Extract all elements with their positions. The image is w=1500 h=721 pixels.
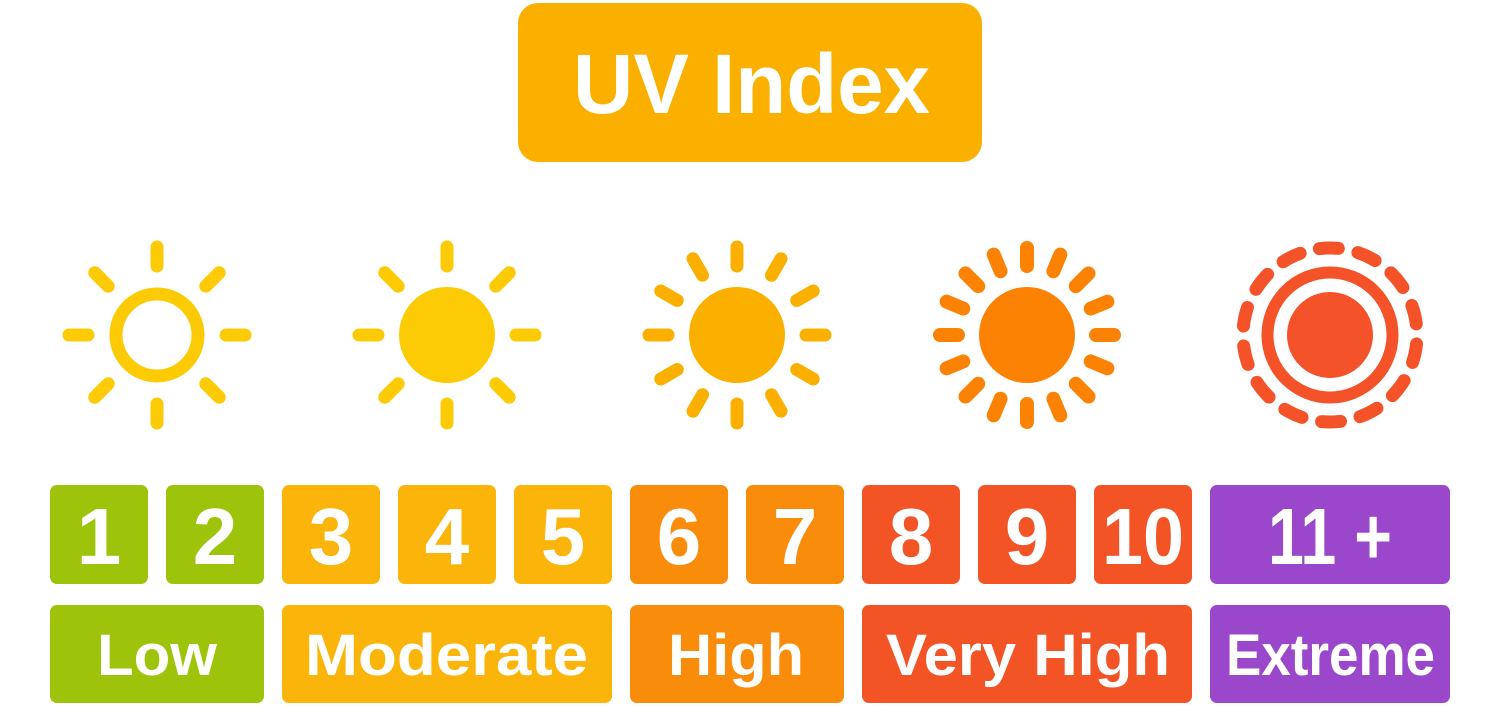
- number boxes: 6: [657, 492, 701, 581]
- icon: sun low (outlined): [69, 247, 245, 423]
- number boxes: 1: [77, 492, 121, 581]
- category labels: Moderate: [305, 623, 588, 688]
- category labels: Low: [97, 623, 218, 688]
- category labels: [50, 605, 1450, 703]
- number boxes: 2: [193, 492, 237, 581]
- icon: sun very high (16 rays): [940, 248, 1114, 422]
- number boxes: 8: [889, 492, 933, 581]
- icon: sun extreme (ringed, dashed): [1233, 238, 1427, 432]
- category labels: High: [668, 623, 804, 688]
- number boxes: 5: [541, 492, 585, 581]
- number boxes: 3: [309, 492, 353, 581]
- title: [518, 3, 982, 162]
- category labels: Very High: [886, 623, 1170, 688]
- number boxes: 10: [1102, 492, 1184, 581]
- icon: sun moderate (filled): [359, 247, 535, 423]
- number boxes: 9: [1005, 492, 1049, 581]
- number boxes: 7: [773, 492, 817, 581]
- icon: sun high (12 rays): [649, 247, 825, 423]
- number boxes: 11 +: [1268, 492, 1392, 581]
- category labels: Extreme: [1226, 623, 1435, 688]
- number boxes: 4: [425, 492, 470, 581]
- number boxes: [50, 485, 1450, 584]
- title: UV Index: [573, 37, 930, 131]
